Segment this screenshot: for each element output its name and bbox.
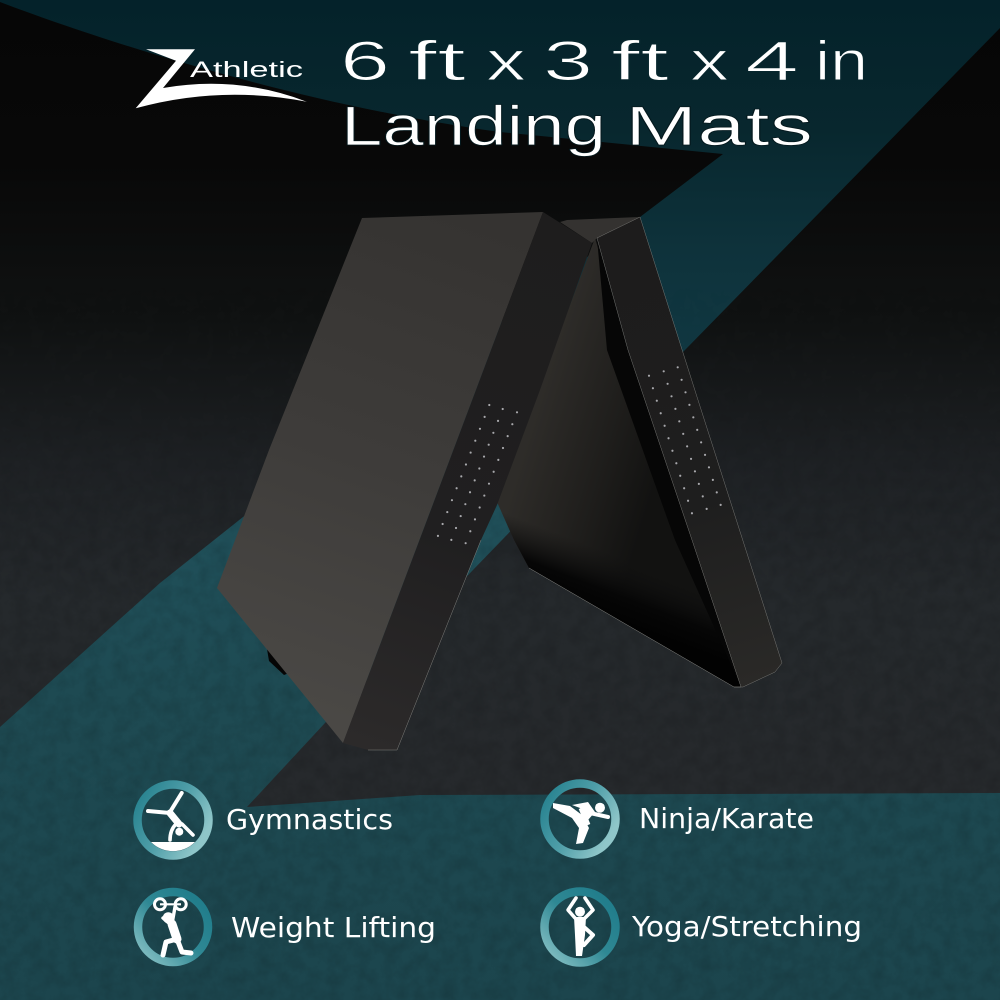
label: Weight Lifting: Weight Lifting bbox=[231, 911, 436, 944]
logo: Z Athletic bbox=[136, 49, 307, 108]
logo mark: Z swoosh bbox=[136, 49, 307, 108]
logo wordmark: Athletic bbox=[190, 57, 303, 82]
label: Ninja/Karate: Ninja/Karate bbox=[639, 802, 814, 835]
mat: perforation dots right bbox=[649, 367, 721, 514]
title line 2: Mats bbox=[625, 94, 813, 157]
title line 1: 6 bbox=[340, 29, 390, 92]
label: Gymnastics: Gymnastics bbox=[226, 803, 393, 836]
mat: dark crease beside right band bbox=[597, 238, 741, 687]
title bbox=[340, 29, 868, 157]
title line 1: ft bbox=[408, 29, 467, 92]
icon: gymnastics bbox=[138, 784, 208, 856]
title line 1: x bbox=[690, 29, 729, 92]
mat: lower interior edge highlight bbox=[529, 568, 734, 687]
mat: perforation dots left bbox=[438, 405, 517, 544]
mat: left band outer edge highlight bbox=[368, 540, 481, 750]
icon: weight lifting bbox=[138, 892, 208, 962]
mat: right side band bbox=[597, 217, 782, 687]
title line 1: in bbox=[815, 29, 868, 92]
icon: ninja / karate bbox=[544, 784, 616, 854]
background: grain texture bbox=[0, 524, 996, 996]
title line 2 bbox=[341, 94, 813, 157]
title line 2: Landing bbox=[341, 94, 606, 157]
title line 1: 3 bbox=[543, 29, 593, 92]
mat: left front face bbox=[217, 212, 543, 743]
icon: yoga / stretching bbox=[544, 892, 616, 962]
mat: interior lower shadow bbox=[497, 480, 741, 687]
title line 1: x bbox=[486, 29, 526, 92]
mat: back top edge bbox=[560, 217, 640, 243]
mat: interior face bbox=[497, 238, 741, 687]
label: Yoga/Stretching: Yoga/Stretching bbox=[631, 910, 862, 943]
product: folded landing mat bbox=[217, 212, 782, 750]
mat: black handle bbox=[267, 649, 289, 675]
title line 1: ft bbox=[611, 29, 670, 92]
mat: left side band bbox=[343, 212, 592, 750]
title line 1 bbox=[340, 29, 868, 92]
title line 1: 4 bbox=[745, 29, 799, 92]
